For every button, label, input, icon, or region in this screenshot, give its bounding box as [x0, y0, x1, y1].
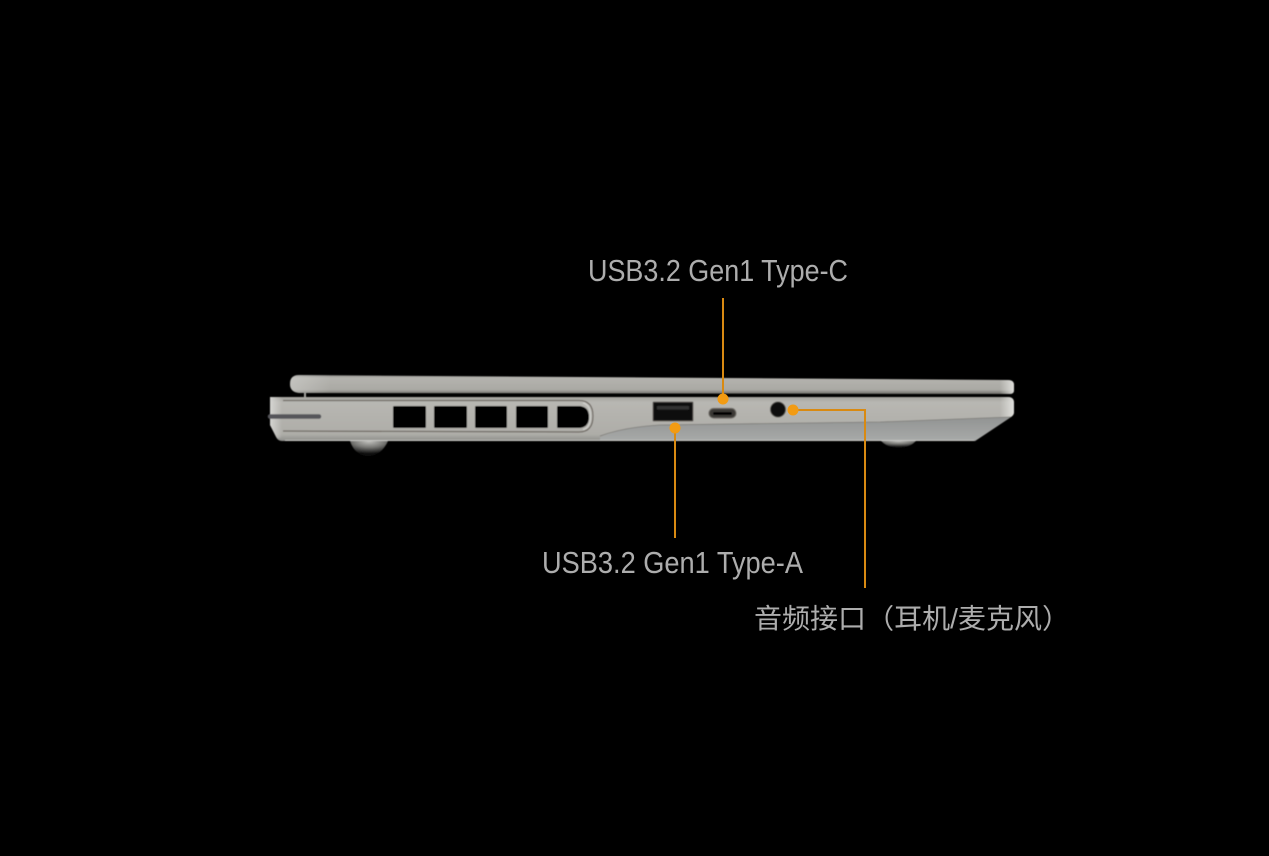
lid left highlight: [290, 375, 330, 393]
hinge gap detail: [304, 393, 306, 397]
rubber foot left: [350, 441, 388, 456]
vent surround line: [283, 400, 593, 432]
base right highlight: [1000, 397, 1014, 417]
label: USB Type-A: USB3.2 Gen1 Type-A: [542, 546, 804, 580]
wedge top shadow line: [600, 417, 1011, 436]
callout: USB Type-A: [670, 422, 680, 538]
lower grey wedge: [600, 417, 1011, 441]
callout: audio jack: [788, 404, 865, 588]
base bottom edge: [285, 440, 974, 442]
left slot: [270, 414, 319, 419]
laptop base: [270, 397, 1014, 441]
callout: USB Type-C: [718, 298, 728, 404]
audio jack: [770, 402, 786, 417]
base left highlight: [270, 397, 282, 438]
vent openings: [393, 406, 589, 428]
laptop lid: [290, 375, 1014, 394]
vent surround highlight: [583, 403, 590, 430]
lid right highlight: [1000, 380, 1014, 394]
label: audio jack: 音频接口（耳机/麦克风）: [754, 603, 1070, 634]
USB Type-A port: [653, 402, 693, 421]
laptop side view: [270, 375, 1014, 456]
label: USB Type-C: USB3.2 Gen1 Type-C: [588, 254, 848, 288]
USB Type-C port: [709, 408, 736, 418]
rubber foot right: [881, 441, 916, 448]
